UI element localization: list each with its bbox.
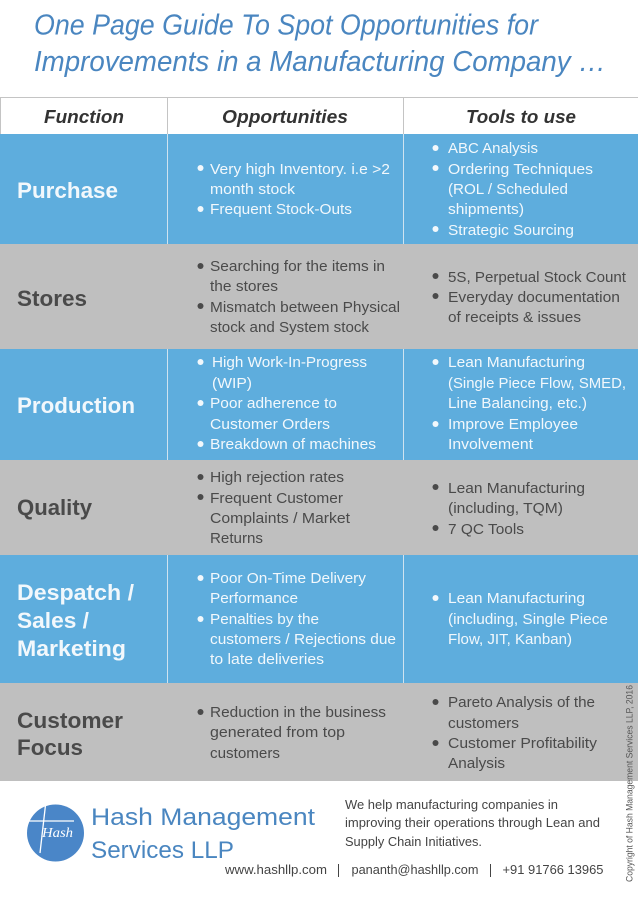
panel: customer focus row: customers [210,745,280,762]
table header: Function [44,106,124,127]
panel: quality row: 7 QC Tools [448,521,524,538]
panel: customer focus row: Pareto Analysis of the [448,694,595,711]
panel: stores row: Everyday documentation [448,289,620,306]
panel: despatch sales marketing row: Penalties by the [210,611,319,628]
panel: customer focus row: Customer Profitability [448,735,598,752]
panel: production row: (WIP) [212,375,252,392]
panel: purchase row: ABC Analysis [448,140,538,157]
panel: purchase row: month stock [210,181,296,198]
panel: stores row: the stores [210,278,278,295]
panel: production row [0,349,638,460]
panel: stores row [0,244,638,349]
panel: customer focus row: Reduction in the business [210,704,386,721]
panel: despatch sales marketing row: customers / Rejections due [210,631,396,648]
panel: customer focus row: customers [448,715,519,732]
panel: quality row: Quality [17,495,93,520]
panel: quality row: Frequent Customer [210,490,343,507]
panel: despatch sales marketing row: Poor On-Time Delivery [210,570,367,587]
panel: production row: Customer Orders [210,416,330,433]
panel: customer focus row: Customer [17,708,123,733]
panel: production row: Breakdown of machines [210,436,376,453]
panel: quality row [0,460,638,555]
panel: purchase row: (ROL / Scheduled [448,181,568,198]
panel: stores row: Searching for the items in [210,258,385,275]
company name: Hash Management [91,804,315,831]
panel: purchase row: Purchase [17,178,118,203]
company name: Services LLP [91,837,234,864]
icon: hash logo [27,804,84,862]
panel: purchase row: shipments) [448,201,524,218]
contact details: pananth@hashllp.com [352,862,478,877]
panel: production row: Production [17,393,135,418]
panel: production row: Lean Manufacturing [448,354,585,371]
icon: hash logo: Hash [41,826,73,841]
panel: despatch sales marketing row: Despatch / [17,580,134,605]
company description: Supply Chain Initiatives. [345,834,482,849]
panel: despatch sales marketing row: Sales / [17,608,89,633]
panel: quality row: High rejection rates [210,469,344,486]
panel: purchase row: Very high Inventory. i.e >2 [210,161,390,178]
panel: despatch sales marketing row: Flow, JIT, Kanban) [448,631,572,648]
company description: We help manufacturing companies in [345,797,558,812]
table header: Opportunities [222,106,348,127]
table header: Tools to use [466,106,576,127]
panel: production row: Improve Employee [448,416,578,433]
company description: improving their operations through Lean and [345,815,600,830]
contact details [224,862,604,877]
panel: quality row: Returns [210,530,263,547]
panel: production row: Involvement [448,436,534,453]
panel: customer focus row [0,683,638,781]
table header [0,97,638,134]
panel: purchase row: Frequent Stock-Outs [210,201,352,218]
panel: despatch sales marketing row: Lean Manufacturing [448,590,585,607]
panel: production row: Line Balancing, etc.) [448,395,587,412]
panel: quality row: Lean Manufacturing [448,480,585,497]
panel: despatch sales marketing row [0,555,638,683]
title: One Page Guide To Spot Opportunities for [34,10,539,42]
panel: stores row: stock and System stock [210,319,370,336]
title: Improvements in a Manufacturing Company … [34,46,606,78]
copyright note: Copyright of Hash Management Services LLP, 2016 [624,685,634,882]
title [34,10,606,78]
panel: stores row: 5S, Perpetual Stock Count [448,269,627,286]
panel: production row: (Single Piece Flow, SMED, [448,375,626,392]
panel: customer focus row: generated from top [210,724,345,741]
panel: quality row: Complaints / Market [210,510,351,527]
panel: despatch sales marketing row: to late deliveries [210,651,324,668]
panel: despatch sales marketing row: Marketing [17,636,126,661]
panel: purchase row: Strategic Sourcing [448,222,574,239]
panel: customer focus row: Focus [17,735,83,760]
panel: stores row: Mismatch between Physical [210,299,400,316]
panel: purchase row: Ordering Techniques [448,161,593,178]
contact details: www.hashllp.com [224,862,327,877]
panel: despatch sales marketing row: Performance [210,590,298,607]
panel: stores row: Stores [17,286,87,311]
panel: quality row: (including, TQM) [448,500,563,517]
panel: customer focus row: Analysis [448,755,505,772]
panel: purchase row [0,134,638,245]
company description [345,797,600,849]
panel: stores row: of receipts & issues [448,309,581,326]
contact details: +91 91766 13965 [502,862,604,877]
panel: despatch sales marketing row: (including, Single Piece [448,611,608,628]
panel: production row: Poor adherence to [210,395,337,412]
panel: production row: High Work-In-Progress [212,354,367,371]
company name [91,804,315,864]
